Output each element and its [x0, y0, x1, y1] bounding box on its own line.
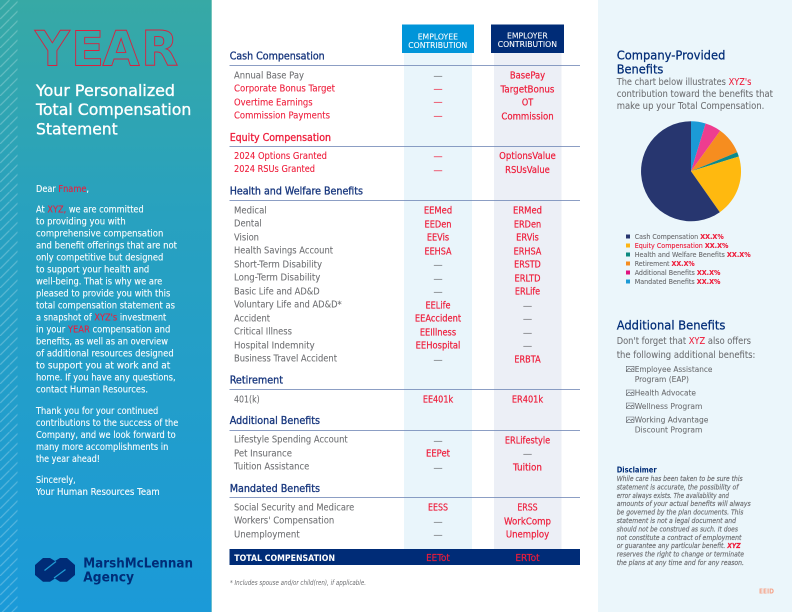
chart intro text — [616, 77, 773, 112]
section: health and welfare benefits: Medical — [234, 205, 267, 216]
section: cash compensation: OT — [522, 97, 533, 108]
letter paragraph: in your YEAR compensation and — [36, 325, 170, 336]
section: health and welfare benefits: Vision — [234, 232, 259, 243]
disclaimer text: statement is accurate, the possibility of — [617, 482, 740, 491]
disclaimer text — [617, 474, 751, 567]
section: additional benefits: EEPet — [426, 448, 450, 459]
letter paragraph: comprehensive compensation — [36, 229, 163, 240]
section: health and welfare benefits: Health Savings Account — [234, 245, 333, 256]
section: cash compensation — [230, 52, 580, 122]
title: Statement — [36, 119, 118, 138]
total compensation bar: TOTAL COMPENSATION — [234, 554, 335, 564]
section: health and welfare benefits: EEHospital — [416, 340, 460, 351]
section: health and welfare benefits: — — [433, 355, 443, 366]
section: health and welfare benefits: — — [523, 301, 532, 312]
chart legend: Health and Welfare Benefits XX.X% — [635, 251, 751, 259]
disclaimer text: the plans at any time and for any reason. — [617, 558, 744, 567]
section: health and welfare benefits: — — [433, 260, 443, 271]
header: employer contribution — [491, 24, 564, 53]
chart legend: Cash Compensation XX.X% — [635, 233, 724, 241]
disclaimer heading: Disclaimer — [617, 465, 657, 475]
section: health and welfare benefits: — — [433, 274, 443, 285]
heading: company-provided benefits — [617, 48, 725, 77]
section: cash compensation: Commission Payments — [234, 110, 330, 121]
section: health and welfare benefits: EEMed — [424, 205, 452, 216]
section: equity compensation: RSUsValue — [505, 165, 550, 176]
section: health and welfare benefits: — — [523, 314, 532, 325]
additional benefits list — [626, 364, 712, 435]
disclaimer text: While care has been taken to be sure this — [617, 474, 743, 483]
section: health and welfare benefits: ERDen — [514, 219, 541, 230]
section: cash compensation: Cash Compensation — [230, 52, 325, 63]
logo wordmark: Agency — [83, 571, 134, 586]
disclaimer text: should not be construed as such. It does — [617, 524, 738, 533]
letter paragraph: to providing you with — [36, 217, 126, 228]
section: cash compensation: TargetBonus — [500, 84, 555, 95]
thank-you paragraph: Company, and we look forward to — [36, 430, 176, 441]
header: employee contribution — [402, 24, 474, 53]
icon: logo mark — [35, 558, 75, 582]
section: health and welfare benefits: ERBTA — [514, 354, 541, 365]
section: health and welfare benefits: EEVis — [427, 232, 449, 243]
section: additional benefits: — — [523, 449, 532, 460]
additional benefits intro: the following additional benefits: — [617, 350, 755, 361]
chart legend — [626, 233, 751, 286]
signature — [35, 475, 160, 498]
greeting: Dear Fname, — [36, 184, 89, 195]
heading: company-provided benefits: Benefits — [617, 62, 664, 77]
letter paragraph: to support your health and — [36, 265, 149, 276]
section: health and welfare benefits: EEHSA — [424, 246, 452, 257]
section: mandated benefits: Unemploy — [506, 529, 550, 540]
signature: Your Human Resources Team — [35, 487, 160, 498]
letter paragraph: pleased to provide you with this — [36, 289, 170, 300]
section: cash compensation: — — [433, 97, 443, 108]
section: mandated benefits: Workers' Compensation — [234, 515, 334, 526]
section: cash compensation: Overtime Earnings — [234, 97, 313, 108]
section: health and welfare benefits: — — [523, 341, 532, 352]
section: mandated benefits — [230, 484, 580, 541]
employee column shading — [404, 52, 472, 549]
letter paragraph: to support you at work and at — [36, 361, 171, 372]
chart intro text: contribution toward the benefits that — [617, 89, 773, 100]
disclaimer text: amounts of your actual benefits will always — [617, 499, 751, 508]
section: mandated benefits: Unemployment — [234, 529, 300, 540]
letter paragraph: benefits, as well as an overview — [36, 337, 168, 348]
section: equity compensation: 2024 RSUs Granted — [234, 164, 315, 175]
footnote: * Includes spouse and/or child(ren), if applicable. — [230, 578, 366, 587]
total compensation bar: ERTot — [515, 553, 540, 564]
section: additional benefits — [230, 416, 580, 474]
disclaimer text: reserves the right to change or terminate — [617, 550, 744, 559]
section: health and welfare benefits: Dental — [234, 218, 262, 229]
letter paragraph: total compensation statement as — [36, 301, 175, 312]
section: mandated benefits: Social Security and Medicare — [234, 502, 355, 513]
additional benefits list: Discount Program — [635, 425, 702, 435]
chart intro text: The chart below illustrates XYZ's — [616, 77, 751, 88]
section: additional benefits: Additional Benefits — [230, 416, 320, 427]
section: health and welfare benefits: Short-Term Disability — [234, 259, 322, 270]
section: additional benefits: Tuition Assistance — [233, 461, 310, 472]
section: health and welfare benefits — [230, 187, 580, 366]
section: health and welfare benefits: — — [523, 328, 532, 339]
section: health and welfare benefits: Critical Illness — [234, 326, 292, 337]
section: mandated benefits: ERSS — [517, 502, 538, 513]
section: health and welfare benefits: EEAccident — [415, 313, 461, 324]
section: mandated benefits: Mandated Benefits — [230, 484, 320, 495]
employee id: EEID — [759, 588, 774, 596]
signature: Sincerely, — [36, 475, 76, 486]
year outline heading: YEAR — [34, 21, 178, 77]
chart legend: Additional Benefits XX.X% — [635, 269, 720, 277]
disclaimer text: statement is not a legal document and — [617, 516, 736, 525]
section: health and welfare benefits: EEDen — [424, 219, 452, 230]
chart legend: Equity Compensation XX.X% — [635, 242, 728, 250]
thank-you paragraph: Thank you for your continued — [35, 406, 158, 417]
section: cash compensation: — — [433, 111, 443, 122]
section: additional benefits: ERLifestyle — [505, 435, 550, 446]
letter paragraph — [36, 205, 177, 396]
section: equity compensation: OptionsValue — [499, 151, 556, 162]
title: Total Compensation — [35, 100, 191, 119]
additional benefits intro: Don't forget that XYZ also offers — [617, 336, 751, 347]
section: retirement: 401(k) — [234, 394, 260, 405]
section: health and welfare benefits: ERLTD — [514, 273, 540, 284]
section: equity compensation — [230, 133, 580, 176]
section: health and welfare benefits: Hospital Indemnity — [234, 340, 315, 351]
section: health and welfare benefits: Long-Term Disability — [234, 272, 321, 283]
logo: MarshMcLennan Agency — [35, 557, 193, 586]
letter paragraph: of additional resources designed — [36, 349, 174, 360]
chart intro text: make up your Total Compensation. — [617, 101, 764, 112]
letter paragraph: a snapshot of XYZ's investment — [36, 313, 166, 324]
section: mandated benefits: — — [433, 517, 443, 528]
header: employer contribution: CONTRIBUTION — [498, 40, 557, 49]
section: additional benefits: — — [433, 463, 443, 474]
additional benefits list: Working Advantage — [635, 415, 708, 425]
thank-you paragraph: the year ahead! — [36, 454, 100, 465]
section: cash compensation: Commission — [501, 111, 554, 122]
section: health and welfare benefits: Business Travel Accident — [234, 353, 337, 364]
total compensation bar — [230, 549, 580, 565]
additional benefits list: Wellness Program — [635, 401, 702, 411]
disclaimer text: error always exists. The availability and — [617, 491, 729, 500]
section: equity compensation: — — [433, 166, 443, 176]
additional benefits intro — [617, 336, 755, 361]
section: health and welfare benefits: EEIllness — [420, 327, 456, 338]
section: health and welfare benefits: Basic Life and AD&D — [234, 286, 320, 297]
section: mandated benefits: — — [433, 530, 443, 541]
pie chart — [641, 121, 741, 221]
section: cash compensation: Annual Base Pay — [234, 70, 304, 81]
header: employer contribution: EMPLOYER — [507, 32, 548, 41]
section: additional benefits: Pet Insurance — [234, 448, 292, 459]
section: equity compensation: Equity Compensation — [230, 133, 331, 144]
logo wordmark: MarshMcLennan — [83, 557, 193, 572]
disclaimer text: be governed by the plan documents. This — [617, 508, 744, 517]
heading: company-provided benefits: Company-Provided — [617, 48, 725, 63]
panel: left letter sidebar — [0, 0, 212, 612]
letter paragraph: only competitive but designed — [36, 253, 163, 264]
section: health and welfare benefits: EELife — [426, 300, 451, 311]
section: equity compensation: — — [433, 152, 443, 162]
section: mandated benefits: EESS — [428, 502, 448, 513]
header: employee contribution: EMPLOYEE — [418, 32, 458, 41]
section: health and welfare benefits: — — [433, 287, 443, 298]
section: retirement: Retirement — [230, 376, 283, 387]
section: cash compensation: Corporate Bonus Target — [234, 84, 335, 95]
employer column shading — [494, 52, 562, 549]
section: retirement — [230, 376, 580, 405]
section: retirement: EE401k — [423, 394, 454, 405]
logo wordmark — [83, 557, 193, 586]
letter paragraph: contact Human Resources. — [36, 385, 148, 396]
panel: compensation table — [230, 24, 580, 587]
title — [35, 81, 191, 138]
section: additional benefits: Tuition — [512, 462, 542, 473]
chart legend: Mandated Benefits XX.X% — [635, 278, 720, 286]
section: cash compensation: BasePay — [510, 70, 546, 81]
heading: additional benefits: Additional Benefits — [617, 318, 726, 333]
section: health and welfare benefits: ERVis — [516, 232, 539, 243]
letter paragraph: home. If you have any questions, — [36, 373, 176, 384]
section: mandated benefits: WorkComp — [504, 516, 551, 527]
section: equity compensation: 2024 Options Granted — [234, 151, 327, 162]
panel: right sidebar — [598, 0, 792, 612]
section: health and welfare benefits: Accident — [234, 313, 270, 324]
letter paragraph: and benefit offerings that are not — [36, 241, 177, 252]
section: additional benefits: Lifestyle Spending Account — [234, 434, 348, 445]
section: health and welfare benefits: Health and Welfare Benefits — [230, 187, 363, 198]
header: employee contribution: CONTRIBUTION — [408, 41, 467, 50]
section: cash compensation: — — [433, 84, 443, 95]
section: health and welfare benefits: ERLife — [515, 286, 540, 297]
thank-you paragraph: many more accomplishments in — [36, 442, 168, 453]
title: Your Personalized — [35, 81, 175, 100]
section: health and welfare benefits: ERHSA — [514, 246, 542, 257]
disclaimer text: not constitute a contract of employment — [617, 533, 742, 542]
section: cash compensation: — — [433, 71, 443, 82]
additional benefits list: Health Advocate — [635, 388, 696, 398]
disclaimer text: or guarantee any particular benefit. XYZ — [617, 541, 741, 550]
section: health and welfare benefits: Voluntary Life and AD&D* — [234, 299, 342, 310]
thank-you paragraph — [35, 406, 178, 465]
section: additional benefits: — — [433, 436, 443, 447]
section: retirement: ER401k — [512, 394, 544, 405]
section: health and welfare benefits: ERSTD — [514, 259, 541, 270]
chart legend: Retirement XX.X% — [635, 260, 695, 268]
letter paragraph: well-being. That is why we are — [36, 277, 162, 288]
thank-you paragraph: contributions to the success of the — [36, 418, 178, 429]
section: health and welfare benefits: ERMed — [513, 205, 542, 216]
total compensation bar: EETot — [426, 553, 450, 564]
additional benefits list: Employee Assistance — [635, 364, 712, 374]
additional benefits list: Program (EAP) — [635, 374, 689, 384]
letter paragraph: At XYZ, we are committed — [36, 205, 144, 216]
